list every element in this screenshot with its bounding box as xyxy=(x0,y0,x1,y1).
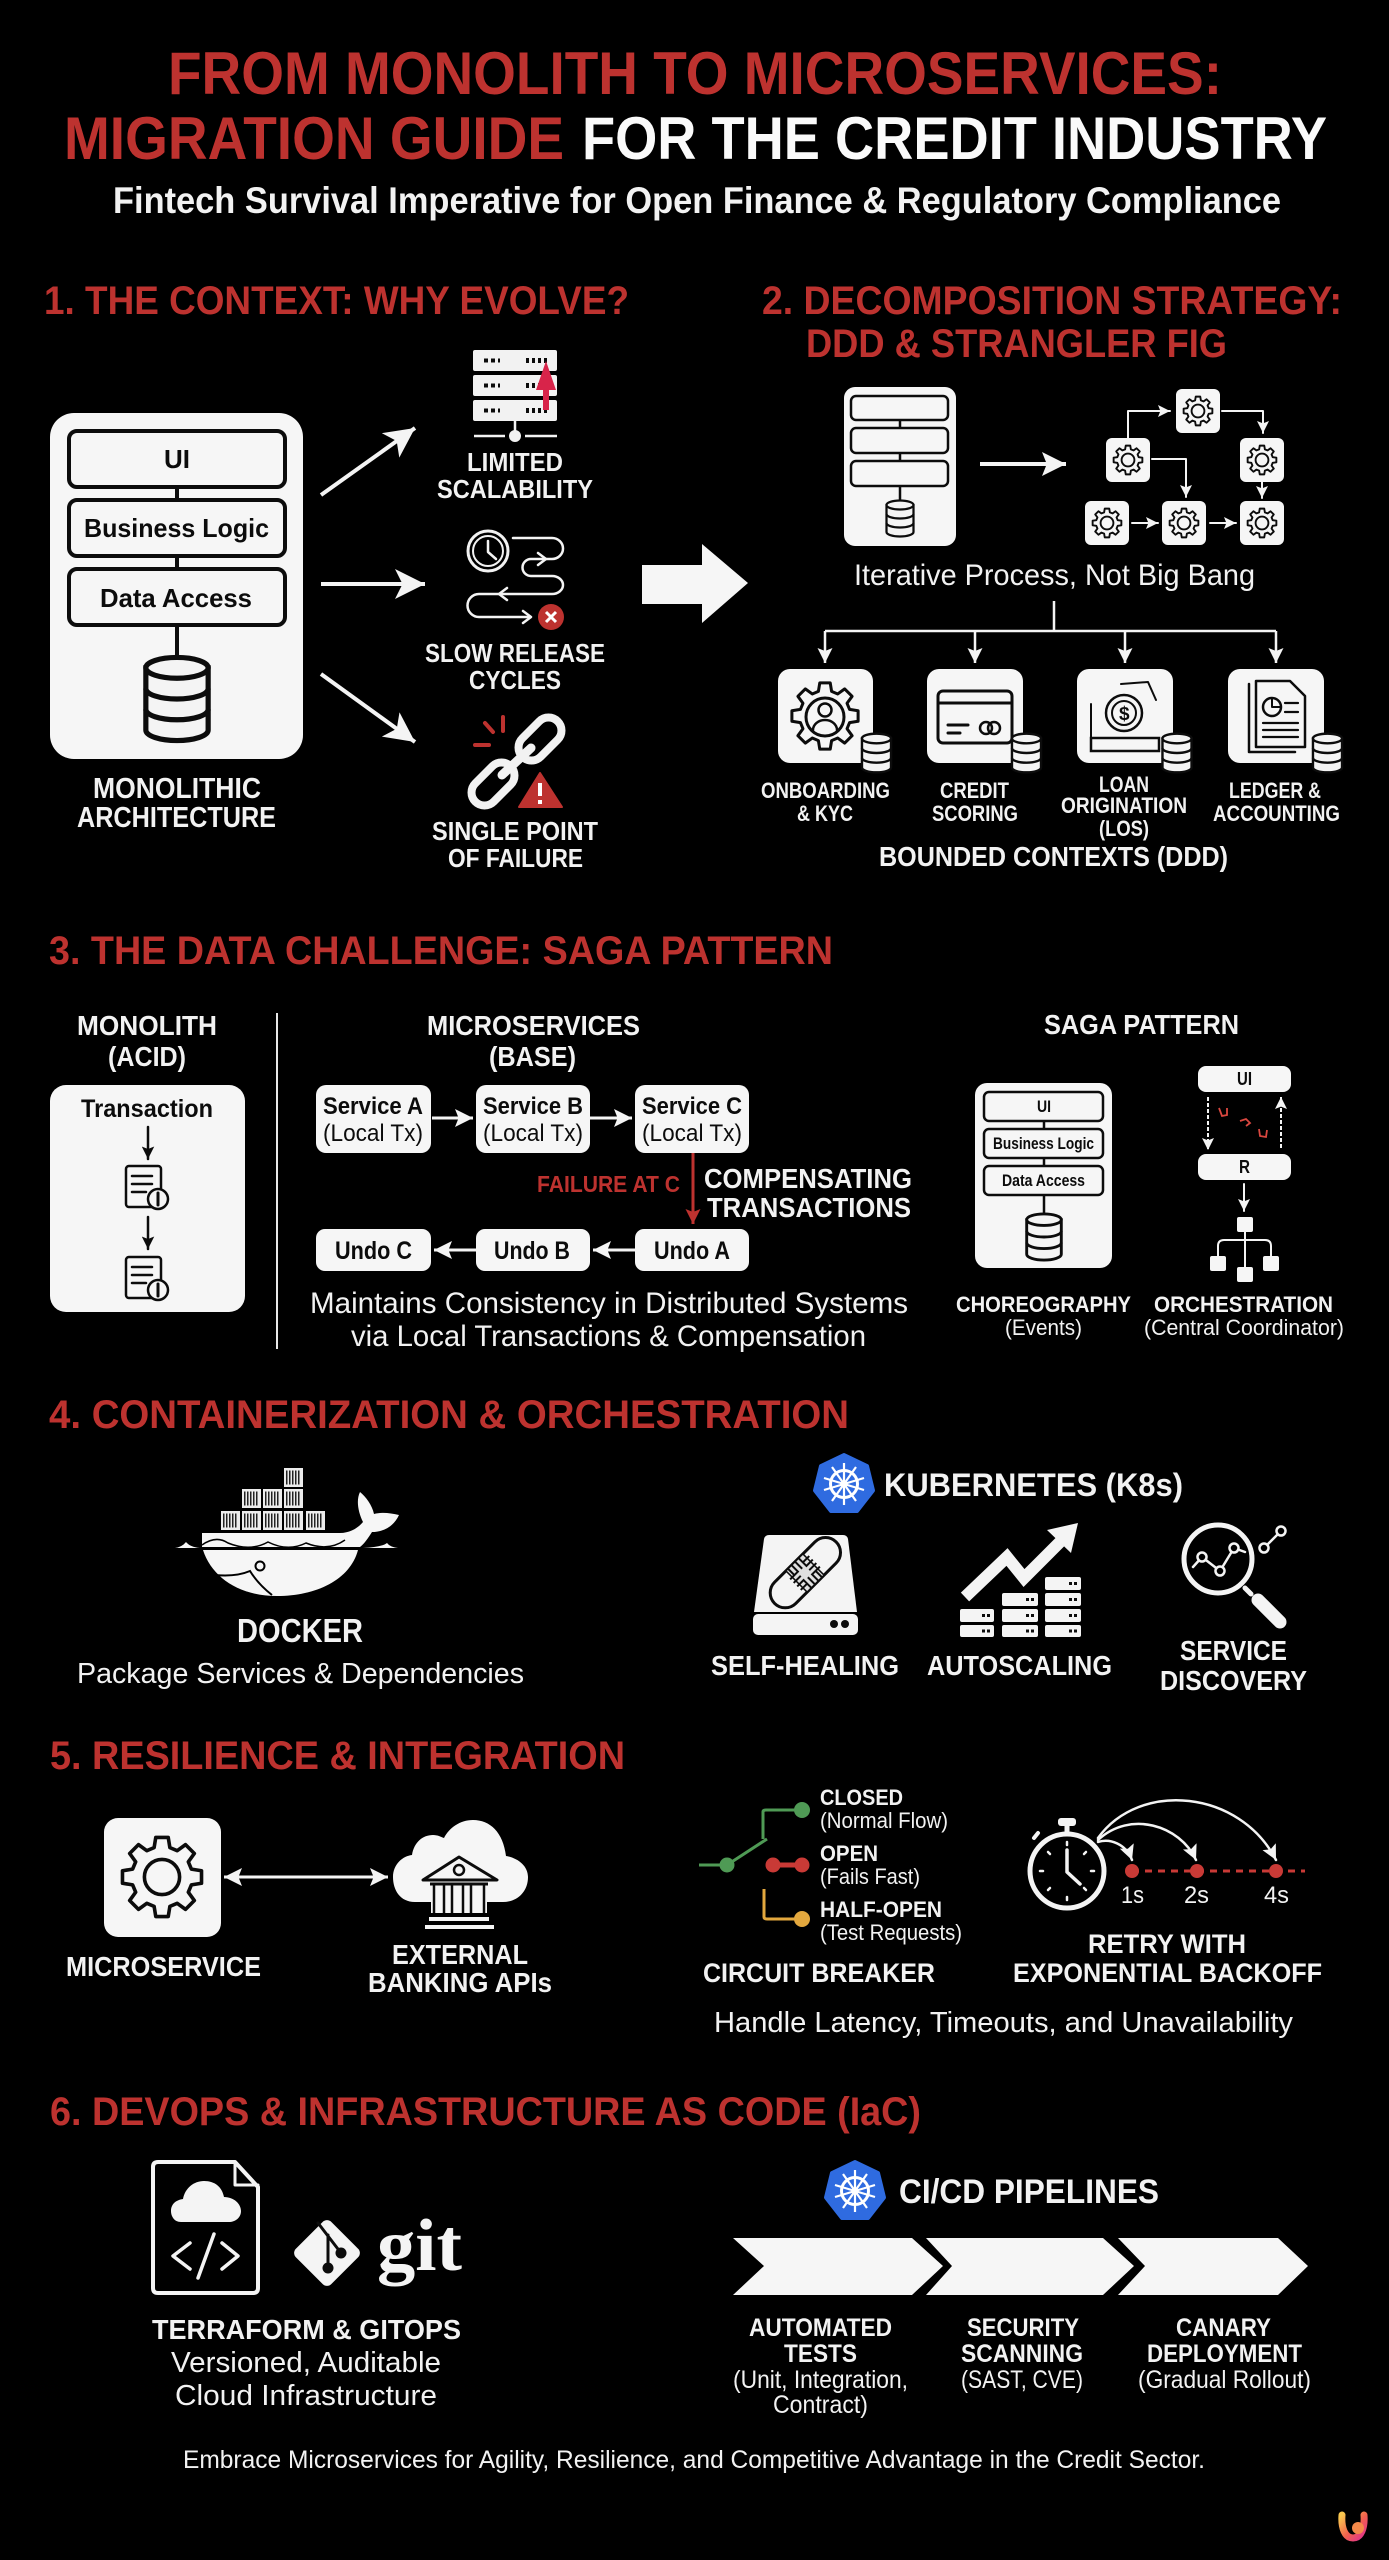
heading: section 2 xyxy=(762,279,1342,366)
panel: section 4 containerization xyxy=(49,1393,1307,1696)
heading: microservices base: MICROSERVICES xyxy=(427,1010,640,1041)
heading: section 2: 2. DECOMPOSITION STRATEGY: xyxy=(762,279,1342,323)
title: FROM MONOLITH TO MICROSERVICES: xyxy=(168,40,1222,107)
icon: server rack xyxy=(473,350,557,442)
context: ledger xyxy=(1228,669,1342,772)
undo arrows xyxy=(434,1248,635,1252)
label: retry backoff: EXPONENTIAL BACKOFF xyxy=(1013,1958,1322,1988)
labels: breaker states: (Test Requests) xyxy=(820,1920,962,1945)
labels: breaker states xyxy=(820,1785,962,1945)
service boxes xyxy=(316,1085,749,1153)
label: slow release cycles: CYCLES xyxy=(469,665,561,695)
heading: microservices base xyxy=(427,1010,640,1072)
retry timeline: 2s xyxy=(1184,1882,1209,1909)
heading: monolith acid: (ACID) xyxy=(108,1041,186,1072)
title: FOR THE CREDIT INDUSTRY xyxy=(582,105,1327,172)
heading: monolith acid xyxy=(77,1010,217,1072)
choreography card: Business Logic xyxy=(993,1134,1094,1153)
caption: consistency: Maintains Consistency in Distributed Systems xyxy=(310,1287,908,1320)
service boxes: Service C xyxy=(642,1093,742,1120)
text: terraform and gitops: Versioned, Auditable xyxy=(171,2347,441,2379)
heading: section 4: 4. CONTAINERIZATION & ORCHESTRATION xyxy=(49,1393,849,1437)
labels: breaker states: OPEN xyxy=(820,1841,878,1866)
arrows to problems xyxy=(321,428,425,742)
icon: git logo xyxy=(292,2218,362,2288)
context labels xyxy=(761,772,1340,841)
heading: ci/cd pipelines: CI/CD PIPELINES xyxy=(899,2173,1159,2211)
icon: terraform file xyxy=(153,2162,258,2293)
service arrows xyxy=(432,1116,632,1120)
monolith card: Data Access xyxy=(100,583,252,613)
tree connector xyxy=(825,601,1276,663)
label: limited scalability xyxy=(437,447,593,504)
pipeline labels: DEPLOYMENT xyxy=(1147,2340,1302,2368)
label: bounded contexts: BOUNDED CONTEXTS (DDD) xyxy=(879,841,1228,872)
heading: kubernetes: KUBERNETES (K8s) xyxy=(884,1467,1183,1503)
icon: slow release clock xyxy=(468,531,564,630)
retry arcs xyxy=(1098,1800,1276,1860)
monolith card: UI xyxy=(164,444,190,474)
arrow: two-way link xyxy=(224,1876,388,1878)
labels: choreography and orchestration: CHOREOGRAPHY xyxy=(956,1292,1131,1317)
undo boxes: Undo C xyxy=(335,1237,412,1265)
pipeline labels: (Unit, Integration, xyxy=(733,2366,908,2394)
title xyxy=(64,40,1327,172)
heading: monolith acid: MONOLITH xyxy=(77,1010,217,1041)
label: slow release cycles: SLOW RELEASE xyxy=(425,638,605,668)
pipeline labels: (SAST, CVE) xyxy=(961,2366,1083,2394)
heading: section 5: 5. RESILIENCE & INTEGRATION xyxy=(50,1734,625,1778)
pipeline labels: AUTOMATED xyxy=(749,2314,892,2342)
text: terraform and gitops: Cloud Infrastructure xyxy=(175,2380,437,2412)
label: monolithic architecture: MONOLITHIC xyxy=(93,773,261,805)
pipeline labels: (Gradual Rollout) xyxy=(1138,2366,1311,2394)
pipeline labels: SCANNING xyxy=(961,2340,1083,2368)
icon: service discovery xyxy=(1184,1525,1286,1622)
label: retry backoff: RETRY WITH xyxy=(1088,1929,1246,1959)
label: compensating transactions xyxy=(704,1163,912,1223)
label: single point of failure: OF FAILURE xyxy=(448,843,583,873)
context labels: LOAN xyxy=(1099,772,1149,797)
choreography card: Data Access xyxy=(1002,1171,1085,1190)
labels: breaker states: (Fails Fast) xyxy=(820,1864,920,1889)
label: circuit breaker: CIRCUIT BREAKER xyxy=(703,1958,935,1988)
label: monolithic architecture: ARCHITECTURE xyxy=(77,802,276,834)
service boxes: (Local Tx) xyxy=(483,1120,583,1147)
transaction card: Transaction xyxy=(81,1095,213,1123)
orchestration diagram: UI xyxy=(1237,1069,1252,1089)
label: git: git xyxy=(377,2205,462,2287)
context labels: CREDIT xyxy=(940,778,1009,803)
text: terraform and gitops: TERRAFORM & GITOPS xyxy=(152,2314,461,2345)
undo boxes xyxy=(316,1229,749,1271)
labels: choreography and orchestration: (Events) xyxy=(1005,1315,1082,1340)
diagram: circuit breaker states xyxy=(699,1802,810,1927)
panel: section 1 context xyxy=(44,279,629,873)
icon: corner logo xyxy=(1342,2515,1364,2538)
subtitle: Fintech Survival Imperative for Open Finance & Regulatory Compliance xyxy=(113,180,1281,221)
pipeline labels: TESTS xyxy=(784,2340,857,2368)
icon: autoscaling xyxy=(960,1523,1081,1637)
label: retry backoff xyxy=(1013,1929,1322,1988)
choreography card: UI xyxy=(1037,1097,1051,1116)
labels: breaker states: (Normal Flow) xyxy=(820,1808,948,1833)
title: MIGRATION GUIDE xyxy=(64,105,564,172)
labels: microservice and external apis: BANKING APIs xyxy=(368,1967,552,1998)
arrow: monolith to services xyxy=(980,462,1066,466)
pipeline labels: SECURITY xyxy=(967,2314,1079,2342)
microservice card xyxy=(104,1818,221,1937)
pipeline chevrons xyxy=(733,2238,1308,2295)
retry timeline: 4s xyxy=(1264,1882,1289,1909)
label: slow release cycles xyxy=(425,638,605,695)
context: loan origination xyxy=(1077,669,1192,772)
panel: section 2 decomposition xyxy=(761,279,1342,872)
heading: saga pattern: SAGA PATTERN xyxy=(1044,1009,1239,1040)
icon: self-healing drive xyxy=(753,1531,858,1635)
labels: microservice and external apis: MICROSERVICE xyxy=(66,1951,261,1982)
caption: iterative process: Iterative Process, Not Big Bang xyxy=(854,559,1255,592)
retry timeline xyxy=(1121,1864,1305,1909)
caption: package services: Package Services & Dependencies xyxy=(77,1658,524,1690)
context: credit scoring xyxy=(927,669,1041,772)
heading: section 3: 3. THE DATA CHALLENGE: SAGA PATTERN xyxy=(49,929,833,973)
icon: broken chain xyxy=(466,712,567,811)
heading: microservices base: (BASE) xyxy=(489,1041,576,1072)
context labels: (LOS) xyxy=(1099,816,1149,841)
caption: consistency xyxy=(310,1287,908,1353)
labels: microservice and external apis: EXTERNAL xyxy=(392,1939,528,1970)
pipeline labels: CANARY xyxy=(1176,2314,1271,2342)
label: monolithic architecture xyxy=(77,773,276,834)
label: limited scalability: LIMITED xyxy=(467,447,563,477)
heading: section 6: 6. DEVOPS & INFRASTRUCTURE AS CODE (IaC) xyxy=(50,2090,921,2134)
orchestration diagram: R xyxy=(1239,1157,1250,1177)
caption: latency: Handle Latency, Timeouts, and Unavailability xyxy=(714,2007,1293,2039)
undo boxes: Undo A xyxy=(654,1237,730,1265)
label: failure at c: FAILURE AT C xyxy=(537,1171,680,1197)
arrow: big transition arrow xyxy=(642,544,748,623)
transaction card xyxy=(50,1085,245,1312)
label: docker: DOCKER xyxy=(237,1612,363,1649)
microservice network xyxy=(1085,389,1284,545)
labels: choreography and orchestration: ORCHESTRATION xyxy=(1154,1292,1333,1317)
context labels: ONBOARDING xyxy=(761,778,890,803)
undo boxes: Undo B xyxy=(494,1237,570,1265)
arrow: failure xyxy=(692,1153,694,1224)
label: single point of failure xyxy=(432,816,598,873)
panel: section 5 resilience xyxy=(50,1734,1322,2039)
context labels: ORIGINATION xyxy=(1061,793,1187,818)
labels: microservice and external apis xyxy=(66,1939,552,1998)
icon: stopwatch xyxy=(1030,1818,1104,1908)
context labels: ACCOUNTING xyxy=(1213,801,1340,826)
footer tagline: Embrace Microservices for Agility, Resilience, and Competitive Advantage in the Credit Sector. xyxy=(183,2446,1205,2474)
context labels: SCORING xyxy=(932,801,1018,826)
choreography card xyxy=(975,1083,1112,1268)
caption: consistency: via Local Transactions & Compensation xyxy=(351,1320,866,1353)
heading: section 2: DDD & STRANGLER FIG xyxy=(806,322,1227,366)
labels: breaker states: CLOSED xyxy=(820,1785,903,1810)
icon: docker whale xyxy=(175,1468,399,1596)
labels: k8s features: SERVICE xyxy=(1180,1635,1287,1666)
text: terraform and gitops xyxy=(152,2314,461,2412)
icon: bank cloud xyxy=(393,1820,528,1927)
labels: k8s features: SELF-HEALING xyxy=(711,1650,899,1681)
service boxes: Service B xyxy=(483,1093,583,1120)
labels: choreography and orchestration xyxy=(956,1292,1344,1340)
context: loan origination: $ xyxy=(1119,704,1130,725)
monolith card xyxy=(50,413,303,759)
pipeline labels: Contract) xyxy=(773,2391,868,2419)
pipeline labels xyxy=(733,2314,1311,2419)
orchestration diagram xyxy=(1198,1066,1291,1282)
service boxes: (Local Tx) xyxy=(642,1120,742,1147)
service boxes: Service A xyxy=(323,1093,423,1120)
retry timeline: 1s xyxy=(1121,1882,1144,1909)
context: onboarding xyxy=(778,669,891,772)
mini monolith xyxy=(844,387,956,546)
label: compensating transactions: TRANSACTIONS xyxy=(707,1192,911,1223)
labels: k8s features: AUTOSCALING xyxy=(927,1650,1112,1681)
service boxes: (Local Tx) xyxy=(323,1120,423,1147)
heading: section 1: 1. THE CONTEXT: WHY EVOLVE? xyxy=(44,279,629,323)
panel: section 6 devops xyxy=(50,2090,1311,2419)
monolith card: Business Logic xyxy=(84,513,269,543)
labels: choreography and orchestration: (Central Coordinator) xyxy=(1144,1315,1344,1340)
context labels: & KYC xyxy=(797,801,853,826)
panel: section 3 data challenge xyxy=(49,929,1344,1353)
label: single point of failure: SINGLE POINT xyxy=(432,816,598,846)
labels: k8s features: DISCOVERY xyxy=(1160,1665,1307,1696)
icon: ci/cd kubernetes xyxy=(826,2162,884,2218)
labels: k8s features xyxy=(711,1635,1307,1696)
label: compensating transactions: COMPENSATING xyxy=(704,1163,912,1194)
labels: breaker states: HALF-OPEN xyxy=(820,1897,942,1922)
icon: kubernetes xyxy=(815,1455,873,1511)
context labels: LEDGER & xyxy=(1229,778,1321,803)
label: limited scalability: SCALABILITY xyxy=(437,474,593,504)
